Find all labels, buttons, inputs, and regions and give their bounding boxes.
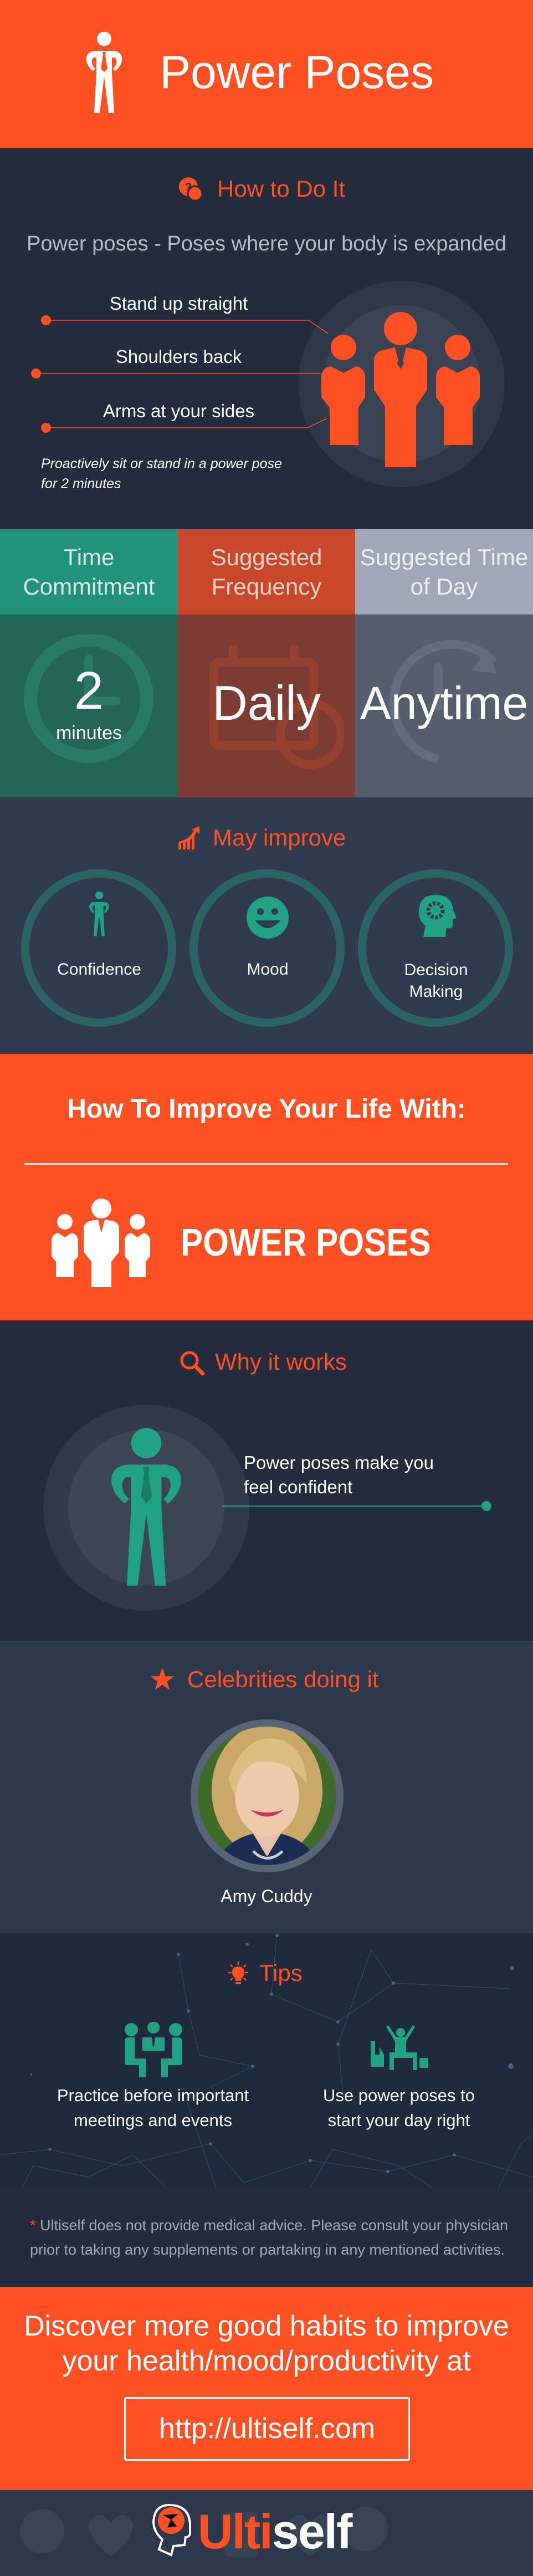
item: decision making: Making — [409, 982, 463, 1001]
text: name: Amy Cuddy — [221, 1886, 312, 1906]
text: why it works: Power poses make you feel confident — [244, 1452, 434, 1497]
illustration: three people in circles — [299, 281, 505, 487]
disclaimer: * Ultiself does not provide medical advice. Please consult your physician prior to taking any supplements or partaking in any mentioned activities. — [30, 2217, 508, 2258]
icon: three people — [52, 1199, 150, 1287]
url button: http://ultiself.com — [159, 2413, 375, 2445]
banner: how to improve your life — [0, 1054, 533, 1320]
heading: may improve: May improve — [213, 824, 346, 851]
card: time commitment — [0, 529, 178, 797]
panel: why it works — [0, 1320, 533, 1641]
illustration: confident figure — [43, 1405, 249, 1611]
item: confidence — [21, 869, 176, 1027]
card: suggested frequency: Suggested — [211, 544, 322, 570]
card: suggested time of day: of Day — [411, 573, 478, 600]
item: mood — [189, 869, 345, 1027]
banner subject: power poses: POWER POSES — [181, 1221, 431, 1264]
heading: tips — [228, 1960, 303, 1986]
card: suggested frequency — [178, 529, 355, 797]
text: arms at your sides: Arms at your sides — [103, 401, 254, 421]
cta text: Discover more good habits to improve your health/mood/productivity at — [24, 2310, 509, 2377]
icon: standing man — [86, 32, 122, 113]
card: time commitment: Time — [64, 544, 114, 570]
call to action band — [0, 2287, 533, 2490]
photo: amy cuddy — [191, 1719, 344, 1872]
heading: celebrities: Celebrities doing it — [187, 1666, 379, 1692]
card: time commitment: Commitment — [23, 573, 155, 600]
connector line — [222, 1501, 491, 1511]
logo: ultiself: Ultiself — [198, 2504, 351, 2559]
panel: may improve — [0, 797, 533, 1054]
tip: practice before meetings — [57, 2022, 249, 2130]
item: mood: Mood — [247, 960, 289, 979]
card: time commitment: 2 — [74, 661, 104, 720]
card: suggested frequency: Frequency — [212, 573, 321, 600]
item: confidence: Confidence — [57, 960, 141, 979]
card: time commitment: minutes — [56, 723, 122, 744]
heading: how to do it: ? — [185, 181, 192, 193]
subtitle: Power poses - Poses where your body is expanded — [27, 232, 506, 255]
text: stand up straight: Stand up straight — [110, 293, 248, 314]
header band — [0, 0, 533, 148]
footer logo band — [0, 2490, 533, 2576]
heading: tips: Tips — [259, 1960, 303, 1986]
disclaimer — [0, 2188, 533, 2287]
title: Power Poses — [160, 46, 434, 98]
tip: start your day — [323, 2025, 475, 2130]
panel: celebrities — [0, 1641, 533, 1933]
card: suggested time of day: Anytime — [360, 677, 528, 729]
item: decision making: Decision — [404, 961, 468, 979]
callout lines — [31, 315, 328, 433]
card: suggested time of day — [355, 529, 533, 797]
panel: stats grid — [0, 529, 533, 797]
card: suggested frequency: Daily — [212, 675, 321, 730]
banner heading: How To Improve Your Life With: — [67, 1094, 466, 1124]
tip: start your day: Use power poses to start your day right — [323, 2086, 475, 2130]
panel: tips — [0, 1933, 533, 2188]
card: suggested time of day: Suggested Time — [360, 544, 528, 570]
note italic: Proactively sit or stand in a power pose for 2 minutes — [41, 456, 282, 491]
item: decision making — [358, 869, 513, 1027]
text: shoulders back: Shoulders back — [116, 346, 242, 367]
heading: why it works: Why it works — [215, 1349, 347, 1375]
url button — [124, 2397, 410, 2461]
panel: how to do it — [0, 148, 533, 529]
heading: how to do it: How to Do It — [217, 176, 345, 202]
tip: practice before meetings: Practice before important meetings and events — [57, 2086, 249, 2130]
